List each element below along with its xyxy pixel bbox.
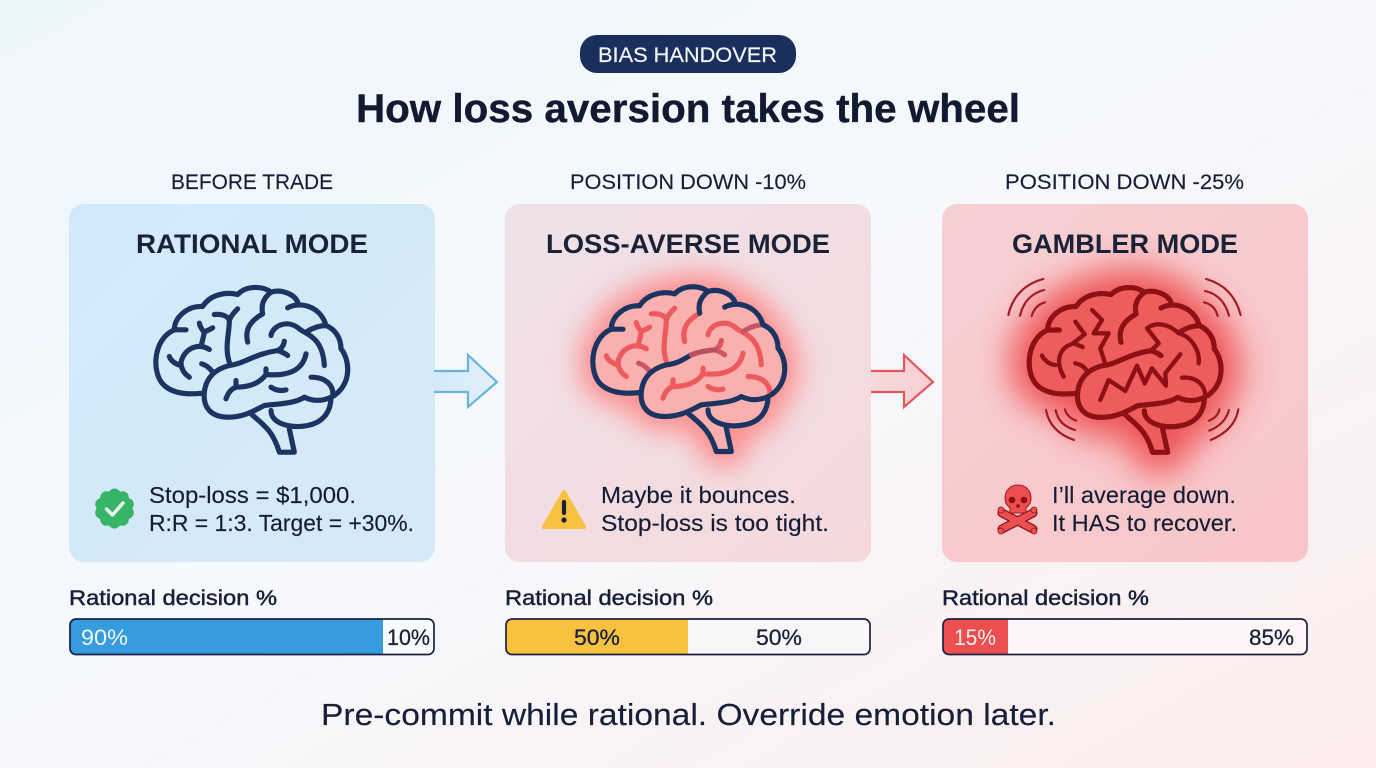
- stage label: position down 10: POSITION DOWN -10%: [570, 171, 806, 194]
- glow: loss-averse: [594, 287, 785, 451]
- panel: rational mode: [69, 171, 435, 654]
- text: plan: R:R = 1:3. Target = +30%.: [149, 510, 414, 536]
- text: plan: [149, 482, 414, 536]
- title: How loss aversion takes the wheel: [356, 87, 1020, 131]
- bar: rational decision 90: Rational decision %: [69, 587, 277, 610]
- icon: stressed brain: [593, 287, 785, 451]
- bar: rational decision 90: 90%: [81, 625, 128, 650]
- heading: gambler mode: GAMBLER MODE: [1012, 229, 1238, 259]
- arrow: rational to loss-averse: [434, 355, 497, 407]
- glow: gambler: [1030, 288, 1221, 452]
- bar: rational decision 50: 50%: [574, 625, 620, 650]
- badge: bias handover: [580, 35, 796, 73]
- heading: rational mode: RATIONAL MODE: [136, 229, 368, 259]
- text: gambler: I’ll average down.: [1052, 482, 1236, 508]
- panel: loss-averse mode: [505, 171, 871, 654]
- stage label: position down 25: POSITION DOWN -25%: [1005, 171, 1244, 194]
- text: wavering: [601, 482, 829, 536]
- callout: gambler thoughts: [998, 482, 1237, 536]
- panel background: rational: [69, 204, 435, 562]
- stage label: before trade: BEFORE TRADE: [171, 171, 333, 194]
- text: plan: Stop-loss = $1,000.: [149, 482, 356, 508]
- bar: rational decision 15: 15%: [954, 625, 996, 650]
- heading: loss-averse mode: LOSS-AVERSE MODE: [546, 229, 830, 259]
- bar: rational decision 50: Rational decision %: [505, 587, 713, 610]
- panel background: gambler: [942, 204, 1308, 562]
- icon: skull and crossbones: [998, 485, 1037, 534]
- text: wavering: Maybe it bounces.: [601, 482, 796, 508]
- icon: green check badge: [95, 488, 134, 528]
- bar: rational decision 15: 85%: [1249, 625, 1294, 650]
- text: gambler: [1052, 482, 1237, 536]
- bar: rational decision 15: Rational decision %: [942, 587, 1149, 610]
- panel background: loss-averse: [505, 204, 871, 562]
- callout: rational plan: [95, 482, 414, 536]
- bar: rational decision 50: 50%: [756, 625, 802, 650]
- icon: warning triangle: [544, 492, 584, 527]
- icon: calm brain: [156, 287, 348, 452]
- text: wavering: Stop-loss is too tight.: [601, 510, 829, 536]
- bar: rational decision 50: [505, 587, 870, 654]
- bar: rational decision 90: [69, 587, 434, 654]
- text: gambler: It HAS to recover.: [1052, 510, 1237, 536]
- bar: rational decision 90: 10%: [387, 625, 430, 650]
- callout: wavering thoughts: [544, 482, 829, 536]
- footer takeaway: Pre-commit while rational. Override emotion later.: [321, 697, 1056, 732]
- arrow: loss-averse to gambler: [871, 355, 933, 407]
- bar: rational decision 15: [942, 587, 1307, 654]
- panel: gambler mode: [942, 171, 1308, 654]
- shake marks: [1008, 279, 1241, 440]
- icon: panicking brain: [1008, 279, 1241, 452]
- badge: bias handover: BIAS HANDOVER: [598, 43, 777, 67]
